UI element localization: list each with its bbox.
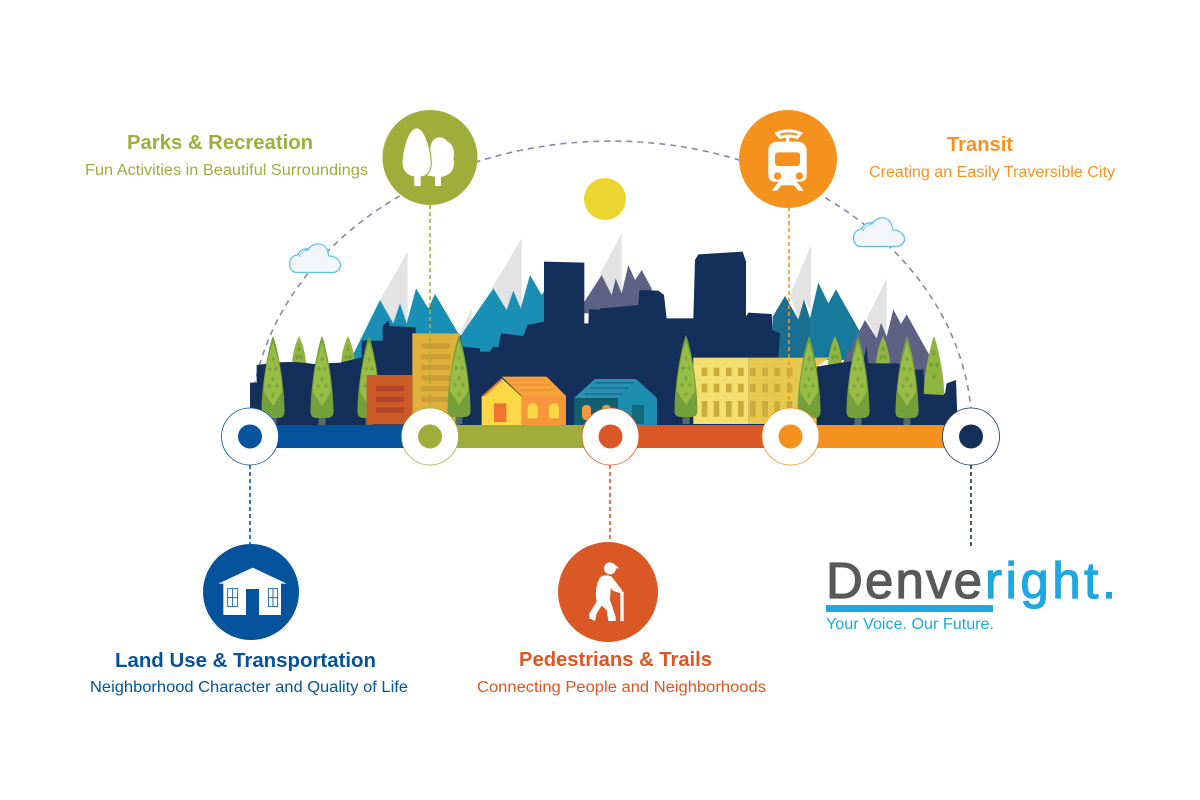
node: navy xyxy=(942,408,1000,465)
dashed connector: parks xyxy=(429,205,431,410)
dashed connector: land use xyxy=(249,465,251,544)
teal house xyxy=(574,379,657,425)
yellow house xyxy=(482,377,566,425)
sun xyxy=(584,178,626,220)
logo: Denveright: right. xyxy=(985,552,1116,609)
left mountains xyxy=(352,238,545,360)
text: parks subtitle: Fun Activities in Beautiful Surroundings xyxy=(85,162,368,179)
logo: Denveright: Your Voice. Our Future. xyxy=(826,616,994,633)
foreground trees xyxy=(262,335,918,425)
heading: land use and transportation: Land Use & Transportation xyxy=(115,650,376,672)
heading: transit: Transit xyxy=(947,134,1013,156)
cloud right xyxy=(854,218,904,246)
text: land use subtitle: Neighborhood Character and Quality of Life xyxy=(90,679,408,696)
skyline left xyxy=(250,262,610,425)
yellow apartment building xyxy=(693,358,830,424)
logo: Denveright xyxy=(826,552,1116,633)
node: blue xyxy=(222,408,278,465)
node: olive xyxy=(402,408,458,465)
right edge tree xyxy=(924,336,944,395)
tree behind buildings xyxy=(358,336,380,425)
text: transit subtitle: Creating an Easily Traversible City xyxy=(869,164,1115,181)
node: orange xyxy=(762,408,819,465)
city scene xyxy=(250,233,958,425)
icon: house xyxy=(203,544,299,640)
text: pedestrians subtitle: Connecting People and Neighborhoods xyxy=(477,679,766,696)
dashed arc xyxy=(250,141,972,431)
skyline right xyxy=(600,252,958,425)
icon: trees xyxy=(382,110,478,205)
orange building xyxy=(367,375,412,424)
yellow tower xyxy=(412,333,460,424)
icon: train xyxy=(739,110,837,208)
background small trees xyxy=(292,336,890,366)
node: red-orange xyxy=(582,408,639,465)
logo: Denveright: Denve xyxy=(826,552,982,609)
cloud left xyxy=(290,244,340,272)
icon: walking person with cane xyxy=(558,542,658,642)
dashed connector: pedestrians xyxy=(609,465,611,542)
dashed connector: transit xyxy=(788,207,790,410)
center and right mountains xyxy=(583,233,929,393)
heading: parks and recreation: Parks & Recreation xyxy=(127,132,313,154)
dashed connector: logo xyxy=(970,465,972,548)
timeline bar xyxy=(250,425,971,448)
heading: pedestrians and trails: Pedestrians & Trails xyxy=(519,649,712,671)
